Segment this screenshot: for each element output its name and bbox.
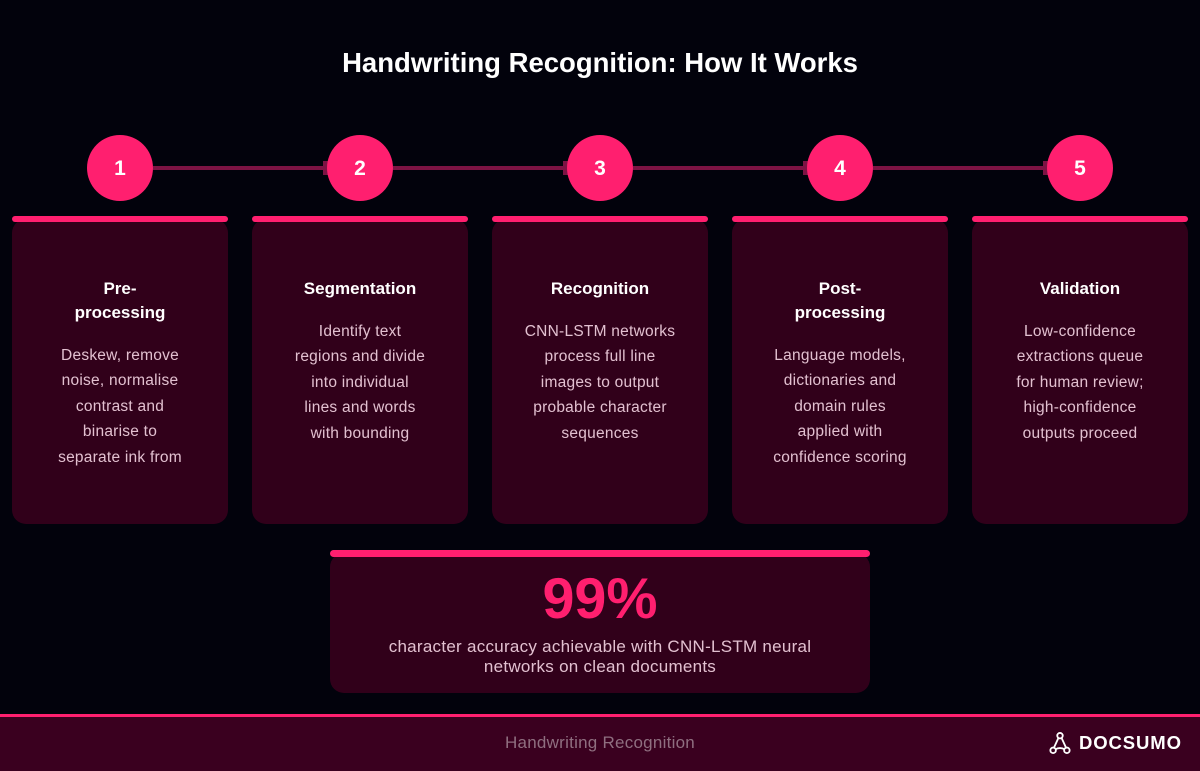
text: recognition description: CNN-LSTM networks [525,323,675,340]
text: validation description [1016,323,1144,442]
text: validation description: for human review; [1016,374,1144,391]
logo: Docsumo [1049,732,1182,754]
text: recognition description: process full line [545,348,655,365]
callout text: networks on clean documents [484,657,716,676]
heading: post-processing: processing [795,303,885,322]
step number 4 [807,135,873,201]
heading: pre-processing: processing [75,303,165,322]
panel: accuracy callout [330,550,870,693]
step number 1 [87,135,153,201]
step number 5 [1047,135,1113,201]
step number 4: 4 [834,157,846,180]
text: post-processing description: confidence scoring [773,449,907,466]
text: segmentation description [295,323,425,442]
arrow tick: step 3 [563,161,568,175]
text: pre-processing description [58,347,182,466]
panel: post-processing [732,216,948,524]
heading: segmentation: Segmentation [304,279,416,298]
text: validation description: outputs proceed [1023,425,1137,442]
footer [0,714,1200,771]
text: recognition description: probable character [533,399,667,416]
arrow tick: step 2 [323,161,328,175]
icon: logo network [1049,732,1070,754]
panel: pre-processing [12,216,228,524]
title: Handwriting Recognition: How It Works [342,47,858,78]
text: post-processing description: domain rules [794,398,886,415]
panel: segmentation [252,216,468,524]
text: recognition description: sequences [561,425,639,442]
arrow tick: step 4 [803,161,808,175]
step number 5: 5 [1074,157,1086,180]
text: pre-processing description: noise, normalise [62,372,178,389]
text: validation description: high-confidence [1023,399,1137,416]
step number 1: 1 [114,157,126,180]
text: pre-processing description: contrast and [76,398,164,415]
text: pre-processing description: Deskew, remove [61,347,179,364]
text: validation description: extractions queue [1017,348,1143,365]
connector: step 3 to 4 [633,166,807,170]
text: recognition description: images to output [541,374,659,391]
text: post-processing description: dictionaries and [784,372,896,389]
panel: recognition [492,216,708,524]
step number 2 [327,135,393,201]
text: pre-processing description: binarise to [83,423,157,440]
text: post-processing description [773,347,907,466]
text: segmentation description: into individual [311,374,409,391]
heading: pre-processing: Pre- [103,279,137,298]
text: segmentation description: Identify text [319,323,401,340]
callout text [389,637,811,676]
step number 3: 3 [594,157,606,180]
text: segmentation description: regions and divide [295,348,425,365]
logo wordmark: DOCSUMO [1079,732,1182,753]
step number 2: 2 [354,157,366,180]
heading: recognition: Recognition [551,279,649,298]
connector: step 4 to 5 [873,166,1047,170]
callout text: character accuracy achievable with CNN-LSTM neural [389,637,811,656]
text: validation description: Low-confidence [1024,323,1136,340]
text: post-processing description: applied with [798,423,882,440]
text: pre-processing description: separate ink from [58,449,182,466]
arrow tick: step 5 [1043,161,1048,175]
step number 3 [567,135,633,201]
panel: validation [972,216,1188,524]
heading: validation: Validation [1040,279,1120,298]
text: post-processing description: Language models, [774,347,906,364]
footer label: Handwriting Recognition [505,733,695,752]
text: recognition description [525,323,675,442]
heading: post-processing: Post- [819,279,861,298]
heading: pre-processing [75,279,165,322]
heading: post-processing [795,279,885,322]
connector: step 2 to 3 [393,166,567,170]
connector: step 1 to 2 [153,166,327,170]
text: segmentation description: lines and words [304,399,416,416]
big number: 99% [542,567,658,631]
text: segmentation description: with bounding [311,425,409,442]
